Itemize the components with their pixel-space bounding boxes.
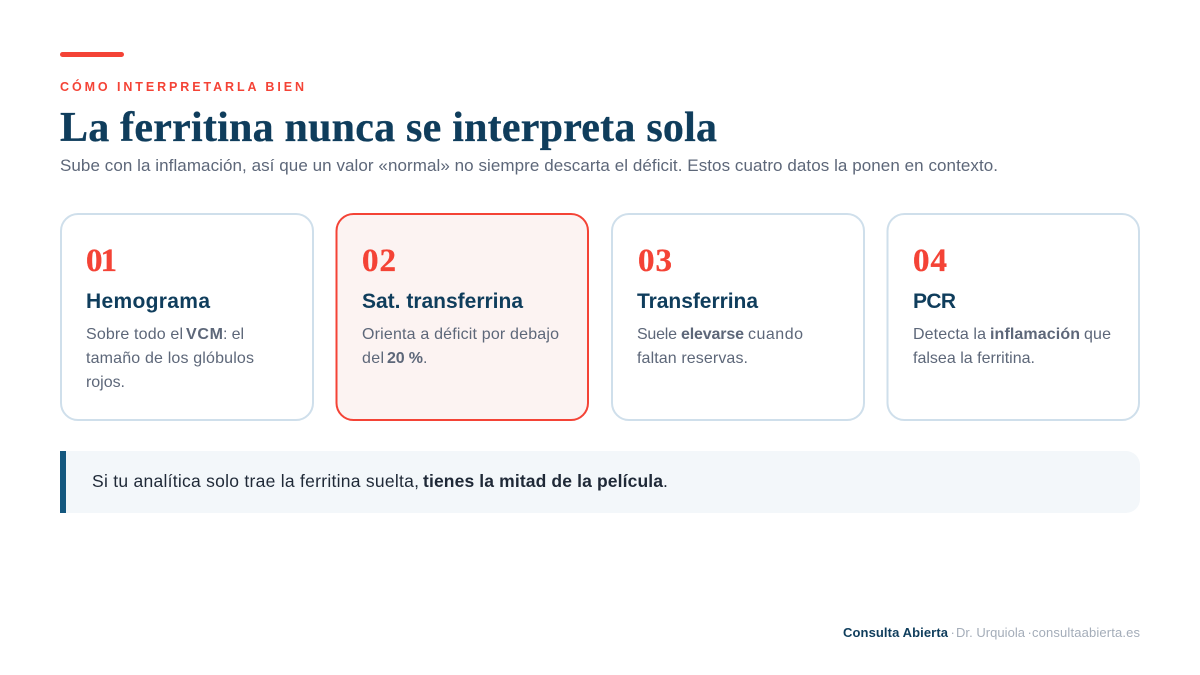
number 01: 01	[86, 243, 117, 279]
heading: Transferrina: Transferrina	[637, 290, 758, 313]
subtitle: Sube con la inflamación, así que un valor «normal» no siempre descarta el déficit. Estos cuatro datos la ponen en contexto.	[60, 156, 998, 175]
callout text	[92, 471, 668, 491]
text: Hemograma description: : el	[223, 326, 244, 343]
text: PCR description: que	[1084, 326, 1111, 343]
title: La ferritina nunca se interpreta sola	[60, 105, 717, 151]
callout text: Si tu analítica solo trae la ferritina suelta,	[92, 471, 419, 491]
panel: card 02 Sat. transferrina	[336, 214, 588, 420]
text: Transferrina description: cuando	[748, 326, 803, 343]
text: PCR description: inflamación	[990, 326, 1080, 343]
text: Transferrina description: faltan reservas.	[637, 350, 748, 367]
number 03: 03	[638, 243, 672, 279]
heading: Hemograma: Hemograma	[86, 290, 210, 313]
text: PCR description	[913, 326, 1111, 367]
text: Hemograma description: rojos.	[86, 374, 125, 391]
number 04: 04	[913, 243, 947, 279]
text: Transferrina description: Suele	[637, 326, 677, 343]
text: Transferrina description	[637, 326, 803, 367]
text: Transferrina description: elevarse	[681, 326, 744, 343]
text: PCR description: Detecta la	[913, 326, 986, 343]
kicker: CÓMO INTERPRETARLA BIEN	[60, 79, 304, 94]
footer: consultaabierta.es	[1032, 625, 1140, 640]
callout	[60, 451, 1140, 513]
text: Sat. transferrina description: del	[362, 350, 384, 367]
text: Sat. transferrina description: 20 %	[387, 350, 423, 367]
text: Hemograma description: Sobre todo el	[86, 326, 183, 343]
text: Sat. transferrina description: .	[423, 350, 427, 367]
panel: card 04 PCR	[888, 214, 1139, 420]
text: Sat. transferrina description: Orienta a déficit por debajo	[362, 326, 559, 343]
callout text: tienes la mitad de la película	[423, 471, 663, 491]
text: Sat. transferrina description	[362, 326, 559, 367]
callout text: .	[663, 471, 668, 491]
panel: card 03 Transferrina	[612, 214, 864, 420]
footer	[843, 625, 1140, 640]
footer: ·	[950, 625, 955, 640]
number 02: 02	[362, 243, 396, 279]
footer: Dr. Urquiola	[956, 625, 1026, 640]
text: Hemograma description: tamaño de los glóbulos	[86, 350, 254, 367]
text: Hemograma description: VCM	[186, 326, 223, 343]
footer: ·	[1028, 625, 1032, 640]
footer: Consulta Abierta	[843, 625, 949, 640]
text: Hemograma description	[86, 326, 254, 391]
heading: Sat. transferrina: Sat. transferrina	[362, 290, 523, 313]
text: PCR description: falsea la ferritina.	[913, 350, 1035, 367]
heading: PCR: PCR	[913, 290, 956, 313]
panel: card 01 Hemograma	[61, 214, 313, 420]
accent bar	[60, 52, 124, 57]
